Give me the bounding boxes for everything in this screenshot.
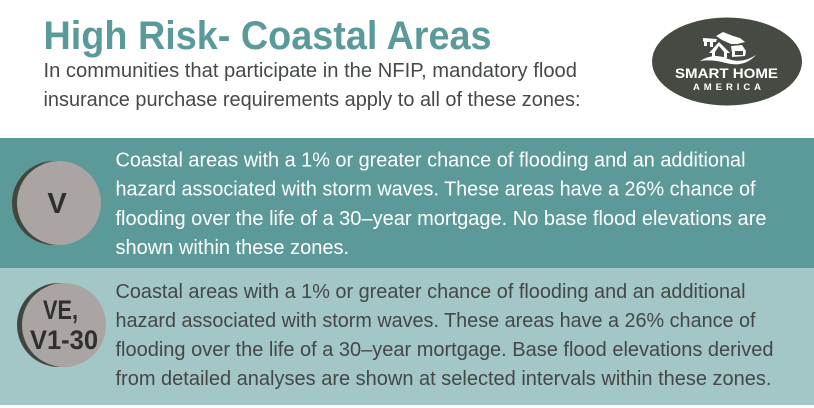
title: High Risk- Coastal Areas xyxy=(44,14,492,58)
zone VE description: from detailed analyses are shown at selected intervals within these zones. xyxy=(116,368,772,390)
icon: zone V badge xyxy=(12,161,101,245)
zone V description xyxy=(116,150,766,259)
panel: zone V xyxy=(0,138,814,268)
zone V description: flooding over the life of a 30–year mortgage. No base flood elevations are xyxy=(116,208,766,230)
logo subtitle: AMERICA xyxy=(693,82,761,93)
icon: zone V badge: V xyxy=(47,188,67,220)
zone VE description xyxy=(116,281,774,390)
intro text xyxy=(44,60,580,111)
zone V description: shown within these zones. xyxy=(116,237,349,259)
icon: zone VE badge: V1-30 xyxy=(30,325,98,355)
logo: Smart Home America xyxy=(652,18,802,106)
zone V description: hazard associated with storm waves. These areas have a 26% chance of xyxy=(116,178,756,200)
panel: zones VE, V1-30 xyxy=(0,268,814,405)
logo wordmark: SMART HOME xyxy=(675,65,778,81)
zone VE description: Coastal areas with a 1% or greater chance of flooding and an additional xyxy=(116,281,746,303)
intro text: insurance purchase requirements apply to all of these zones: xyxy=(44,89,580,111)
zone V description: Coastal areas with a 1% or greater chance of flooding and an additional xyxy=(116,150,746,172)
zone VE description: hazard associated with storm waves. These areas have a 26% chance of xyxy=(116,310,756,332)
zone VE description: flooding over the life of a 30–year mortgage. Base flood elevations derived xyxy=(116,339,774,361)
intro text: In communities that participate in the NFIP, mandatory flood xyxy=(44,60,577,82)
icon: zone VE badge xyxy=(17,283,106,367)
icon: house xyxy=(700,32,756,64)
icon: zone VE badge: VE, xyxy=(43,295,78,325)
